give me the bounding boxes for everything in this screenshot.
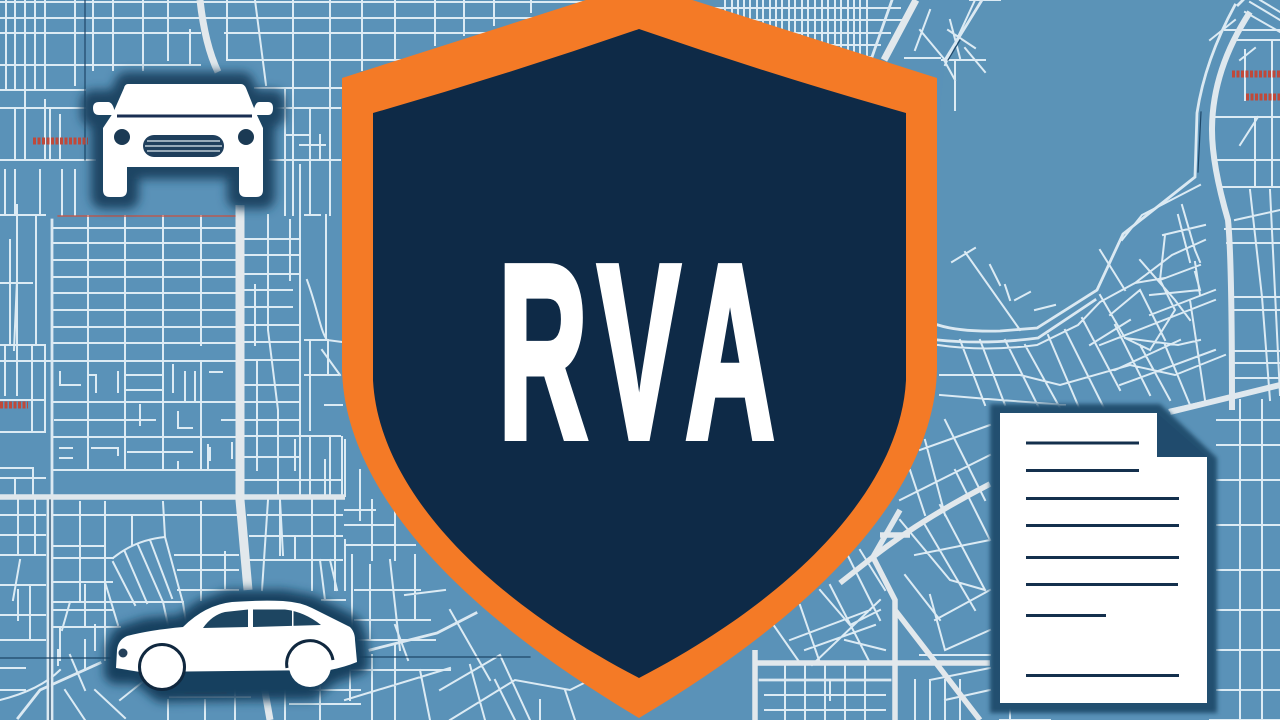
shield navy centre <box>373 29 906 678</box>
car front mirrors <box>93 102 273 115</box>
document frame <box>990 404 1217 713</box>
car front halo <box>93 84 273 197</box>
car side wheels <box>140 641 333 690</box>
icon: document <box>990 404 1217 713</box>
car front headlights <box>114 129 254 145</box>
thin streets: left and top grid <box>0 0 1000 720</box>
thick roads <box>0 497 900 557</box>
document text lines <box>1026 442 1179 677</box>
RVA text: RVA <box>498 214 775 490</box>
document folded corner <box>1157 413 1207 457</box>
car side windows <box>203 610 321 628</box>
car front body <box>103 84 263 197</box>
car side headlight <box>118 648 128 658</box>
car side halo <box>116 602 357 690</box>
document page <box>1000 413 1207 703</box>
red map labels <box>58 215 235 217</box>
car side body <box>116 601 357 672</box>
lake <box>938 0 1238 331</box>
thin streets: shore and east grid <box>765 0 1280 720</box>
car front grille <box>143 135 224 157</box>
shield orange border <box>342 0 937 718</box>
car front hood line <box>117 114 252 118</box>
icon: car side view <box>116 601 357 690</box>
icon: car front view <box>93 84 273 197</box>
